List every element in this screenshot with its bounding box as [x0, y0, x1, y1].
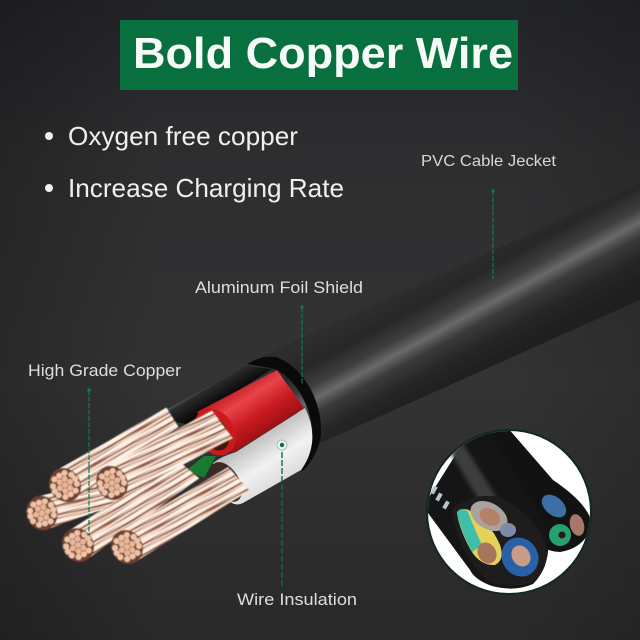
copper bundle: lower right: [105, 464, 251, 570]
title banner: Bold Copper Wire: [133, 29, 513, 78]
white wire insulation: [203, 408, 312, 508]
title banner: [120, 20, 518, 90]
callout: PVC cable jacket: PVC Cable Jecket: [421, 153, 557, 170]
bullet: oxygen free copper: Oxygen free copper: [68, 121, 298, 151]
callout: high grade copper: High Grade Copper: [28, 361, 181, 380]
main cable illustration: [22, 183, 640, 570]
bullet: increase charging rate: Increase Charging Rate: [68, 173, 344, 203]
copper conductors: [22, 403, 251, 570]
copper bundle: lower left: [55, 455, 203, 568]
callout: wire insulation: [237, 440, 357, 609]
callout: wire insulation: Wire Insulation: [237, 590, 357, 609]
callout: PVC cable jacket: [421, 153, 557, 279]
black wire: [153, 366, 272, 424]
copper bundle: front upper: [90, 408, 234, 506]
callout: aluminum foil shield: [195, 278, 363, 384]
inset: grey conductor: [470, 501, 508, 531]
inset: jacket print marks: [430, 486, 450, 509]
inset: left cable: [424, 432, 549, 589]
red wire insulation: [186, 370, 304, 463]
copper bundle: back left: [43, 403, 182, 508]
inset: cable cross-section photo: [424, 425, 592, 595]
inset: teal and yellow conductor: [457, 509, 502, 567]
PVC cable jacket: [247, 183, 640, 471]
copper bundle: far left: [22, 475, 122, 534]
feature list: [45, 121, 344, 203]
callout: aluminum foil shield: Aluminum Foil Shield: [195, 278, 363, 297]
green wire: [187, 456, 216, 478]
inset: right cable: [483, 431, 590, 552]
inset: blue conductor: [500, 523, 538, 576]
callout: high grade copper: [28, 361, 181, 535]
